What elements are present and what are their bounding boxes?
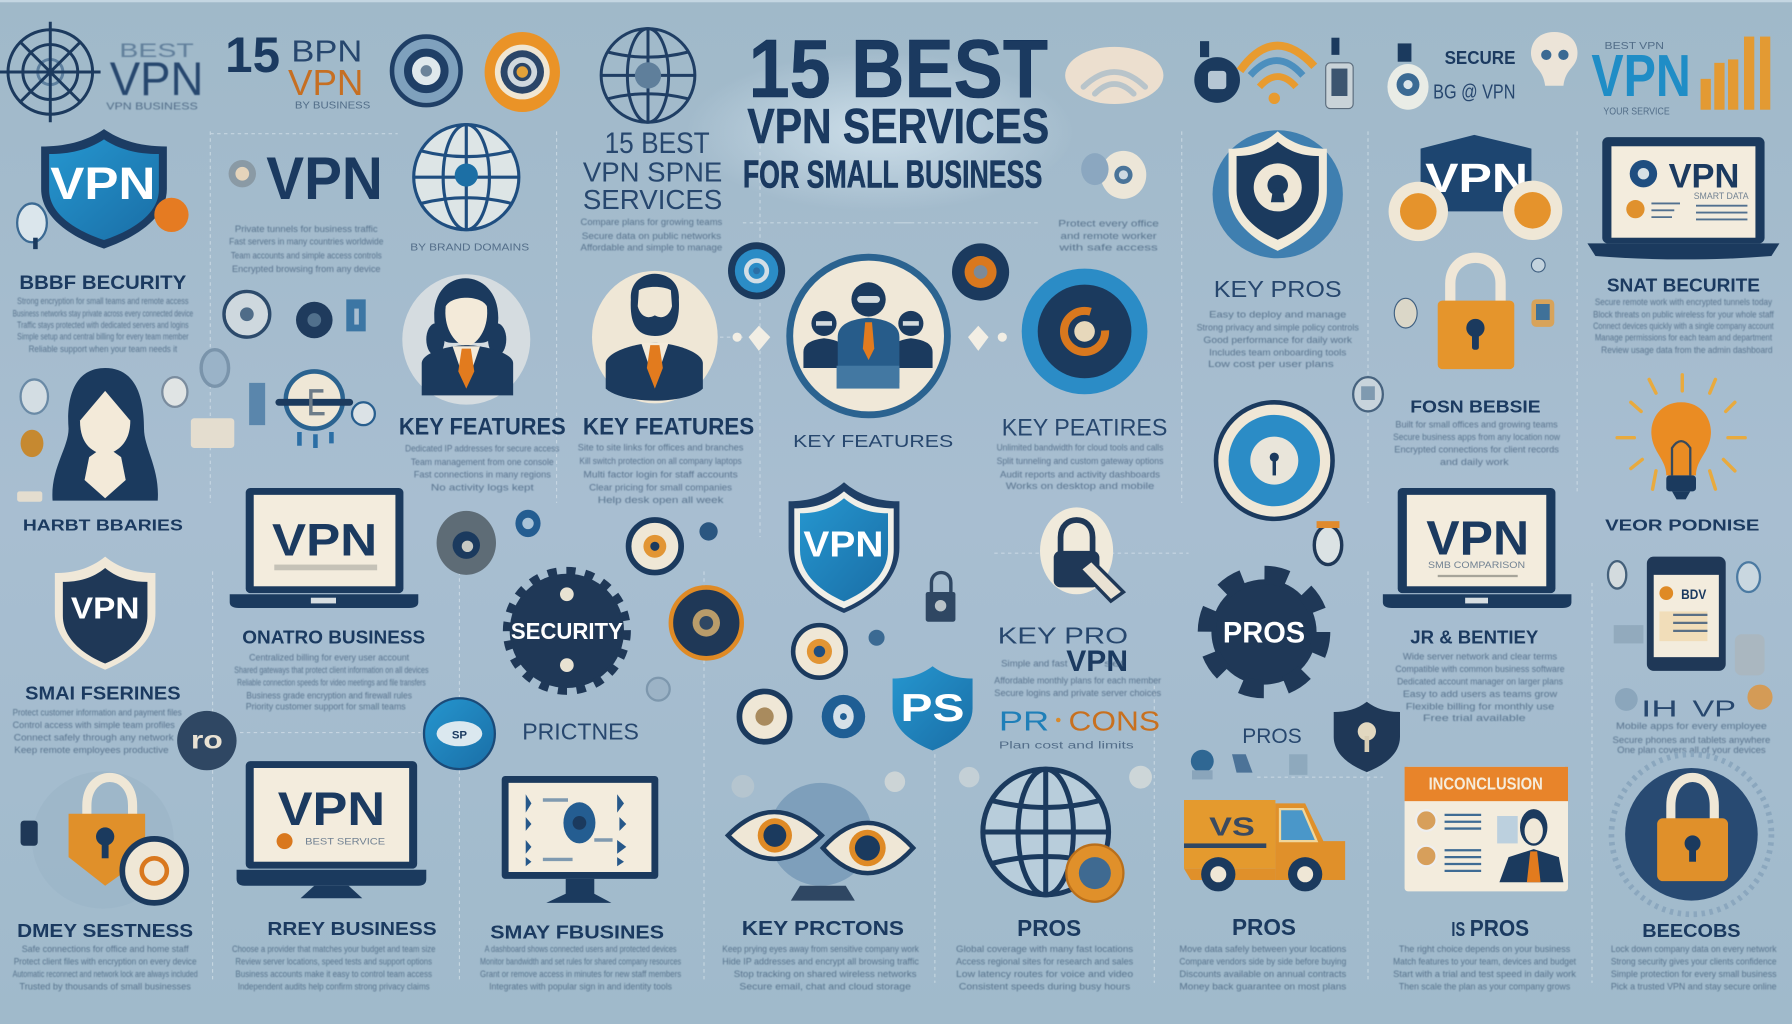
heading: pros cons bbox=[999, 705, 1160, 736]
text block: col 7: Start with a trial and test speed in daily work bbox=[1393, 969, 1576, 979]
text block: security: Business networks stay private across every connected device bbox=[13, 309, 193, 319]
icon: garbled badges and skull: SECURE bbox=[1445, 47, 1515, 68]
text block: fosn: Built for small offices and growing teams bbox=[1395, 419, 1558, 429]
icon: monitor vpn: VPN bbox=[278, 783, 385, 835]
icon: laptop top right: VPN bbox=[1669, 157, 1739, 195]
text block: col 1 bbox=[13, 944, 198, 992]
icon: small badge bbox=[1314, 521, 1342, 565]
icon: dark ro badge: ro bbox=[191, 727, 223, 755]
icon: lock and tag bbox=[1040, 507, 1123, 601]
text block: col 7: Then scale the plan as your company grows bbox=[1399, 982, 1571, 992]
text block: smai: Protect customer information and payment files bbox=[13, 707, 182, 717]
icon: laptop middle right bbox=[1383, 488, 1571, 608]
text block: col 2 bbox=[232, 944, 435, 992]
heading: smay fbusines: SMAY FBUSINES bbox=[490, 921, 664, 942]
text block: features 2: Help desk open all week bbox=[598, 495, 724, 505]
icon: navy vpn shield: VPN bbox=[71, 590, 139, 625]
title: VPN SERVICES bbox=[747, 100, 1049, 154]
card: in conclusion bbox=[1405, 767, 1568, 891]
icon: globe with coin bbox=[959, 766, 1152, 902]
text block: features 3: Audit reports and activity dashboards bbox=[1000, 470, 1160, 480]
heading: pros cons: CONS bbox=[1069, 705, 1160, 736]
icon: blue c disk bbox=[1022, 269, 1147, 394]
text block: col 3: A dashboard shows connected users and protected devices bbox=[485, 944, 677, 954]
text block: features 2: Clear pricing for small companies bbox=[589, 482, 732, 492]
text block: key pro bbox=[994, 658, 1162, 698]
text block: services: Secure data on public networks bbox=[582, 231, 722, 241]
heading: prictnes: PRICTNES bbox=[522, 718, 639, 744]
title: FOR SMALL BUSINESS bbox=[743, 153, 1042, 196]
title bbox=[743, 24, 1049, 196]
icon: orange badge bbox=[952, 243, 1009, 301]
text block: smart security bbox=[1593, 297, 1774, 355]
heading: pros col 6: PROS bbox=[1232, 914, 1296, 940]
text block: col 5: Access regional sites for research and sales bbox=[956, 957, 1134, 967]
icon: orange truck bbox=[1184, 800, 1345, 891]
icon: pros gear bbox=[1207, 575, 1321, 689]
heading: smart security: SNAT BECURITE bbox=[1607, 274, 1760, 295]
heading: pros col 5: PROS bbox=[1017, 915, 1081, 941]
heading: best vpn logo bbox=[106, 40, 203, 113]
text block: jr bentiey: Compatible with common business software bbox=[1395, 664, 1565, 674]
text block: phone bbox=[1613, 721, 1770, 755]
heading: 15 bpn vpn bbox=[225, 26, 370, 112]
heading: veor podnise: VEOR PODNISE bbox=[1605, 517, 1760, 534]
text block: phone: Secure phones and tablets anywhere bbox=[1613, 735, 1770, 745]
text block: onatro: Shared gateways that protect client information on all devices bbox=[234, 665, 429, 675]
icon: laptop middle right: SMB COMPARISON bbox=[1428, 560, 1525, 570]
heading: best vpn logo: BEST bbox=[119, 40, 194, 62]
heading: jr bentiey: JR & BENTIEY bbox=[1410, 626, 1538, 647]
icon: garbled badges and skull: BG @ VPN bbox=[1433, 80, 1515, 103]
text block: features 1: No activity logs kept bbox=[431, 482, 534, 492]
text block: smai bbox=[13, 707, 182, 755]
icon: vpn banner bbox=[1389, 135, 1562, 241]
title: 15 BEST bbox=[749, 24, 1048, 115]
text block: col 5: Consistent speeds during busy hours bbox=[959, 982, 1131, 992]
caption: globe: BY BRAND DOMAINS bbox=[410, 242, 529, 253]
text block: col 4: Hide IP addresses and encrypt all browsing traffic bbox=[722, 957, 919, 967]
icon: blue wave badge: SP bbox=[452, 729, 467, 741]
text block: features 2: Multi factor login for staff accounts bbox=[583, 470, 738, 480]
text block: col 5: Global coverage with many fast locations bbox=[956, 944, 1134, 954]
heading: dmey sestness: DMEY SESTNESS bbox=[17, 920, 193, 941]
icon: navy vpn shield bbox=[55, 557, 155, 670]
text block: key pros bbox=[1197, 310, 1359, 369]
heading: beecobs: BEECOBS bbox=[1642, 920, 1741, 941]
icon: woman figure bbox=[52, 368, 158, 501]
text block: col 8: Pick a trusted VPN and stay secure online bbox=[1611, 982, 1777, 992]
icon: light bulb bbox=[1617, 375, 1745, 499]
text block: key pro: Simple and fast bbox=[1001, 658, 1068, 668]
icons: center small rings bbox=[739, 625, 885, 742]
heading: 15 best vpn services small: VPN SPNE bbox=[583, 157, 722, 188]
icon: monitor vpn: BEST SERVICE bbox=[305, 837, 385, 847]
heading: 15 best vpn services small bbox=[583, 127, 722, 215]
icon: laptop top right: SMART DATA bbox=[1694, 191, 1749, 201]
heading: onatro business: ONATRO BUSINESS bbox=[242, 626, 425, 647]
icon: garbled badges and skull bbox=[1387, 32, 1578, 110]
text block: col 3: Grant or remove access in minutes for new staff members bbox=[480, 969, 682, 979]
text block: smai: Connect safely through any network bbox=[14, 733, 174, 743]
caption: pros cons: Plan cost and limits bbox=[999, 741, 1134, 752]
text block: col 2: Business accounts make it easy to control team access bbox=[235, 969, 432, 979]
icon: cream wifi bbox=[1065, 47, 1163, 104]
icon: security gear bbox=[507, 571, 626, 690]
text block: onatro: Reliable connection speeds for video meetings and file transfers bbox=[237, 678, 426, 688]
text block: features 1 bbox=[405, 443, 560, 492]
heading: large vpn: VPN bbox=[266, 144, 383, 212]
text block: col 6: Money back guarantee on most plans bbox=[1179, 982, 1347, 992]
icon: g badge bbox=[249, 371, 375, 448]
text block: key pros: Includes team onboarding tools bbox=[1209, 347, 1347, 357]
icon: phone bbox=[1647, 557, 1726, 671]
panel: blue vpn shield bbox=[17, 129, 189, 249]
text block: onatro: Priority customer support for small teams bbox=[246, 702, 406, 712]
heading: 15 best vpn services small: SERVICES bbox=[583, 184, 722, 215]
text block: fosn: Encrypted connections for client records bbox=[1394, 445, 1559, 455]
text block: services: Affordable and simple to manage bbox=[581, 242, 722, 252]
text block: jr bentiey: Flexible billing for monthly use bbox=[1406, 702, 1554, 712]
text block: features 2 bbox=[578, 442, 744, 505]
text block: col 4: Stop tracking on shared wireless networks bbox=[734, 969, 917, 979]
text block: col 3: Monitor bandwidth and set rules for shared company resources bbox=[480, 957, 681, 967]
heading: pros col 7: PROS bbox=[1470, 915, 1529, 941]
icon: blue ring bbox=[392, 37, 461, 105]
text block: onatro: Centralized billing for every user account bbox=[249, 653, 410, 663]
heading: best vpn logo: VPN BUSINESS bbox=[106, 102, 198, 113]
heading: key prctons: KEY PRCTONS bbox=[742, 917, 904, 940]
card: in conclusion: INCONCLUSION bbox=[1429, 774, 1543, 794]
icon: orange padlock bbox=[1394, 258, 1554, 369]
text block: col 3: Integrates with popular sign in and identity tools bbox=[489, 982, 672, 992]
icon: laptop middle left bbox=[230, 488, 418, 608]
icon: keyhole shield bbox=[1213, 130, 1343, 258]
text block: security: Traffic stays protected with dedicated servers and logins bbox=[17, 320, 189, 330]
diamonds bbox=[733, 326, 1007, 351]
text block: smai: Keep remote employees productive bbox=[14, 745, 169, 755]
icon: small bubble bbox=[1353, 377, 1383, 411]
text block: features 3 bbox=[997, 442, 1164, 491]
text block: col 8: Strong security gives your clients confidence bbox=[1611, 957, 1777, 967]
text block: col 6: Compare vendors side by side before buying bbox=[1179, 957, 1346, 967]
text block: key pro: set bbox=[1104, 658, 1125, 668]
text block: col 1: Trusted by thousands of small businesses bbox=[19, 982, 191, 992]
text block: col 8 bbox=[1611, 944, 1777, 992]
icons: faint small shapes bbox=[1191, 750, 1307, 779]
icon: central vpn shield: VPN bbox=[803, 524, 883, 565]
text block: col 7: The right choice depends on your business bbox=[1399, 944, 1571, 954]
text block: top right small: with safe access bbox=[1058, 242, 1158, 252]
icon: dark shield bbox=[1334, 702, 1400, 772]
icon: ps shield bbox=[893, 666, 973, 751]
text block: vpn: Private tunnels for business traffic bbox=[235, 224, 378, 234]
text block: col 6 bbox=[1179, 944, 1347, 992]
vpn logo with bars: YOUR SERVICE bbox=[1603, 106, 1670, 117]
text block: features 2: Kill switch protection on all company laptops bbox=[579, 456, 742, 466]
text block: security: Strong encryption for small teams and remote access bbox=[17, 296, 189, 306]
text block: col 4: Secure email, chat and cloud storage bbox=[739, 982, 911, 992]
heading: key pro vpn: KEY PRO bbox=[998, 622, 1128, 648]
icon: orange truck: VS bbox=[1209, 811, 1255, 841]
heading: key pros: KEY PROS bbox=[1214, 276, 1342, 302]
headings: key features: KEY FEATURES bbox=[793, 431, 953, 451]
heading: 15 bpn vpn: VPN bbox=[288, 62, 363, 103]
heading: 15 best vpn services small: 15 BEST bbox=[605, 127, 710, 160]
heading: 15 bpn vpn: BY BUSINESS bbox=[295, 101, 370, 112]
icons: small row bbox=[224, 291, 366, 338]
icon: blue ring keyhole bbox=[1216, 402, 1333, 519]
icon: dark ro badge bbox=[177, 711, 237, 770]
icon: orange ring bbox=[671, 587, 742, 658]
text block: security: Simple setup and central billing for every team member bbox=[17, 331, 189, 341]
icon: blue badge bbox=[728, 242, 785, 299]
text block: smai: Control access with simple team profiles bbox=[13, 720, 175, 730]
icons: phone side icons bbox=[1608, 561, 1765, 675]
icon: laptop top right bbox=[1587, 137, 1779, 259]
text block: vpn: Team accounts and simple access controls bbox=[231, 250, 382, 260]
text block: fosn: Secure business apps from any location now bbox=[1393, 432, 1560, 442]
text block: col 4 bbox=[722, 944, 919, 992]
text block: col 1: Protect client files with encryption on every device bbox=[14, 957, 197, 967]
text block: col 1: Automatic reconnect and network lock are always included bbox=[13, 969, 198, 979]
text block: col 3 bbox=[480, 944, 682, 992]
text block: key pros: Easy to deploy and manage bbox=[1209, 310, 1346, 320]
heading: best vpn logo: VPN bbox=[110, 53, 203, 105]
icon: phone: BDV bbox=[1681, 587, 1707, 602]
text block: features 3: Split tunneling and custom gateway options bbox=[997, 456, 1164, 466]
headings: key features: KEY FEATURES bbox=[583, 413, 754, 440]
text block: security bbox=[13, 296, 193, 354]
text block: features 2: Site to site links for offices and branches bbox=[578, 442, 744, 452]
text block: fosn bbox=[1393, 419, 1560, 467]
vpn logo with bars bbox=[1591, 37, 1770, 117]
text block: col 8: Lock down company data on every network bbox=[1611, 944, 1777, 954]
icons: small rings bbox=[437, 510, 718, 701]
text block: jr bentiey bbox=[1395, 651, 1565, 723]
heading: fosn bebsie: FOSN BEBSIE bbox=[1410, 397, 1541, 417]
text block: onatro bbox=[234, 653, 429, 712]
icons: vp row: VP bbox=[1693, 696, 1736, 722]
text block: key pro: Affordable monthly plans for each member bbox=[994, 675, 1161, 685]
heading: harbt bbaries: HARBT BBARIES bbox=[23, 517, 183, 534]
icon: laptop middle right: VPN bbox=[1426, 512, 1529, 565]
icon: man avatar bbox=[592, 271, 718, 403]
heading: smai fserines: SMAI FSERINES bbox=[25, 682, 181, 703]
heading: 15 bpn vpn: BPN bbox=[291, 34, 362, 69]
icons: left mid cluster bbox=[17, 350, 234, 502]
text block: security: Reliable support when your team needs it bbox=[29, 344, 178, 354]
icon: dark badge and wifi bbox=[1194, 38, 1353, 109]
text block: col 8: Simple protection for every small business bbox=[1611, 969, 1777, 979]
text block: jr bentiey: Free trial available bbox=[1423, 713, 1526, 723]
headings: key features bbox=[399, 413, 1167, 451]
heading: pros cons: PR bbox=[999, 705, 1049, 736]
heading: bbbf becurity: BBBF BECURITY bbox=[19, 272, 186, 294]
text block: features 1: Fast connections in many regions bbox=[414, 470, 551, 480]
vpn logo with bars: BEST VPN bbox=[1605, 41, 1664, 52]
heading: 15 bpn vpn: 15 bbox=[225, 26, 280, 83]
icon: blue wave badge bbox=[424, 698, 495, 769]
text block: top right small: and remote worker bbox=[1061, 231, 1157, 241]
icon: small lock bbox=[926, 573, 955, 622]
icon: web globe bbox=[0, 22, 101, 122]
text block: onatro: Business grade encryption and firewall rules bbox=[246, 690, 412, 700]
text block: fosn: and daily work bbox=[1440, 457, 1509, 467]
text block: services bbox=[581, 217, 723, 252]
text block: phone: One plan covers all of your devices bbox=[1617, 745, 1766, 755]
headings: key features: KEY PEATIRES bbox=[1002, 414, 1167, 441]
icon: central vpn shield bbox=[789, 482, 899, 613]
text block: features 3: Unlimited bandwidth for cloud tools and calls bbox=[997, 442, 1164, 452]
text block: key pros: Good performance for daily work bbox=[1203, 335, 1352, 345]
icon: security gear: SECURITY bbox=[511, 618, 623, 644]
icon: cream globe bbox=[414, 125, 519, 230]
text block: smart security: Review usage data from the admin dashboard bbox=[1601, 345, 1773, 355]
icon: padlock in dark circle bbox=[1611, 754, 1771, 914]
icon: monitor vpn bbox=[237, 761, 426, 898]
text block: col 5 bbox=[956, 944, 1134, 992]
headings: key features: KEY FEATURES bbox=[399, 413, 566, 440]
heading: rrey business: RREY BUSINESS bbox=[267, 918, 437, 939]
icon: pros gear: PROS bbox=[1223, 616, 1305, 649]
text block: key pros: Low cost per user plans bbox=[1208, 359, 1334, 369]
heading: key pro vpn bbox=[998, 622, 1128, 678]
text block: features 3: Works on desktop and mobile bbox=[1006, 481, 1154, 491]
text block: col 2: Review server locations, speed tests and support options bbox=[235, 957, 432, 967]
icon: eyes and globe bbox=[728, 771, 913, 901]
text block: col 6: Move data safely between your locations bbox=[1179, 944, 1347, 954]
icon: vpn banner: VPN bbox=[1425, 155, 1528, 201]
icon: ps shield: PS bbox=[901, 687, 965, 730]
text block: phone: Mobile apps for every employee bbox=[1616, 721, 1767, 731]
icon: padlock with coin bbox=[21, 771, 186, 909]
text block: col 7: Match features to your team, devices and budget bbox=[1393, 957, 1576, 967]
icon: team circle bbox=[790, 257, 947, 415]
text block: col 4: Keep prying eyes away from sensitive company work bbox=[722, 944, 919, 954]
text block: features 1: Team management from one console bbox=[411, 457, 554, 467]
text block: top right small: Protect every office bbox=[1058, 218, 1159, 228]
icon: laptop middle left: VPN bbox=[272, 514, 377, 565]
icon: dashboard monitor bbox=[502, 776, 658, 903]
text block: col 2: Choose a provider that matches your budget and team size bbox=[232, 944, 435, 954]
heading: pros col 7: IS bbox=[1451, 918, 1465, 941]
heading: key pro vpn: VPN bbox=[1066, 645, 1128, 678]
icons: vp row: IH bbox=[1641, 696, 1678, 722]
text block: vpn bbox=[229, 224, 383, 274]
text block: services: Compare plans for growing teams bbox=[581, 217, 723, 227]
icon: globe top bbox=[601, 29, 695, 122]
icon: orange target bbox=[485, 32, 560, 112]
icon: woman avatar bbox=[402, 274, 530, 405]
text block: key pro: Secure logins and private server choices bbox=[994, 688, 1162, 698]
text block: vpn: Encrypted browsing from any device bbox=[232, 264, 381, 274]
text block: col 5: Low latency routes for voice and video bbox=[956, 969, 1133, 979]
text block: col 1: Safe connections for office and home staff bbox=[22, 944, 189, 954]
text block: col 2: Independent audits help confirm strong privacy claims bbox=[238, 982, 430, 992]
heading: pros small: PROS bbox=[1242, 723, 1302, 748]
text block: col 7 bbox=[1393, 944, 1576, 992]
text block: vpn: Fast servers in many countries worldwide bbox=[229, 237, 383, 247]
text block: jr bentiey: Wide server network and clear terms bbox=[1403, 651, 1558, 661]
icons: vp row bbox=[1615, 685, 1773, 722]
text block: key pros: Strong privacy and simple policy controls bbox=[1197, 322, 1359, 332]
text block: features 1: Dedicated IP addresses for secure access bbox=[405, 443, 560, 453]
vpn logo with bars: VPN bbox=[1591, 42, 1691, 109]
text block: jr bentiey: Dedicated account manager on larger plans bbox=[1397, 677, 1563, 687]
panel: blue vpn shield: VPN bbox=[50, 158, 155, 209]
text block: top right small bbox=[1058, 218, 1159, 252]
icon: small cream lens bbox=[1081, 151, 1146, 199]
text block: col 6: Discounts available on annual contracts bbox=[1179, 969, 1347, 979]
text block: smart security: Secure remote work with encrypted tunnels today bbox=[1595, 297, 1772, 307]
text block: jr bentiey: Easy to add users as teams grow bbox=[1403, 689, 1558, 699]
